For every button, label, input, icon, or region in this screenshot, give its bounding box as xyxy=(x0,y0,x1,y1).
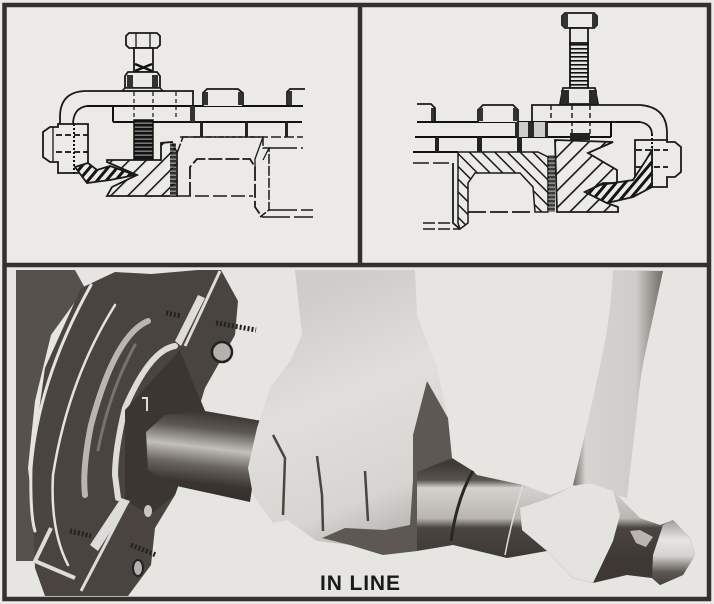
dark pin, left xyxy=(170,143,176,196)
hatched hub section, right xyxy=(555,140,618,212)
clamp tip, left xyxy=(75,163,135,183)
drift shaft xyxy=(146,411,262,502)
threaded screws xyxy=(70,313,256,555)
panel: top-right cross-section diagram xyxy=(360,5,709,265)
panel: top-left cross-section diagram xyxy=(5,5,360,265)
clamp arm, right xyxy=(532,105,667,143)
hand gripping shaft xyxy=(248,270,452,555)
side nut and block, left xyxy=(43,124,88,175)
hatched flange and wheel profile, right xyxy=(413,152,555,229)
clamp arm, left xyxy=(60,91,193,130)
finger creases xyxy=(273,435,368,531)
hatched hub section, left xyxy=(107,142,177,196)
small hook xyxy=(142,398,147,411)
inner hub dark xyxy=(125,350,205,515)
hammer handle xyxy=(573,270,663,498)
hammer head lobe xyxy=(520,483,620,583)
icon: bolt with hex head, right xyxy=(551,13,598,135)
wheel profile, left xyxy=(177,137,313,217)
clamp tip, right xyxy=(585,150,652,203)
hand shadow xyxy=(322,381,452,555)
plate and top nuts, left xyxy=(87,89,305,137)
small lower bolt xyxy=(133,560,143,576)
pulley rim highlights xyxy=(31,285,175,565)
side nut and block, right xyxy=(635,134,681,187)
punch end xyxy=(410,458,695,585)
hammer ball face xyxy=(652,520,695,585)
plates and nuts, right xyxy=(413,104,640,152)
icon: bolt with hex head, left xyxy=(122,33,163,91)
pulley and mounting plate xyxy=(31,270,256,596)
bolt nut xyxy=(212,342,232,362)
threaded screw, left xyxy=(134,120,153,159)
panel: bottom photograph xyxy=(5,265,709,599)
caption: IN LINE xyxy=(320,572,400,595)
dark backing behind wheel xyxy=(16,270,85,561)
mounting bars xyxy=(35,271,220,591)
